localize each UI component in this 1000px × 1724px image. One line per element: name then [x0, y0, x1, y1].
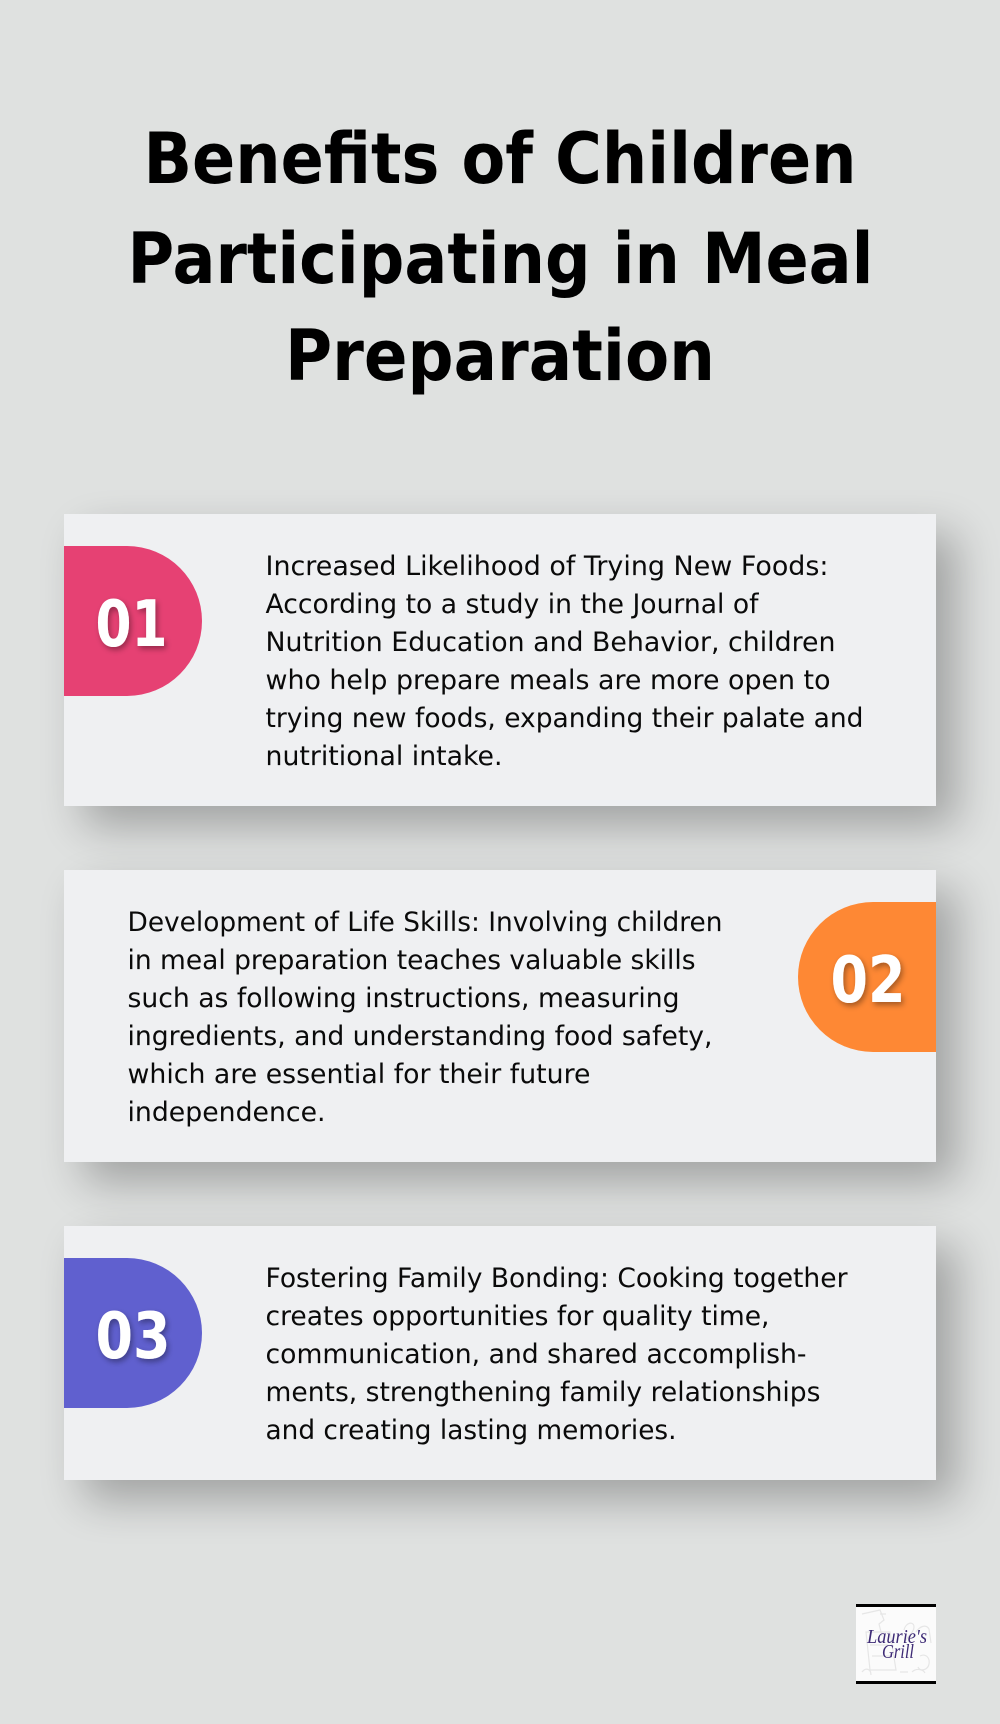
text: family bonding	[266, 1263, 848, 1446]
panel: benefit 03	[64, 1226, 956, 1500]
text: family bonding: ments, strengthening family relationships	[266, 1377, 820, 1408]
title: Preparation	[285, 315, 715, 397]
panel: benefit 02	[64, 870, 956, 1182]
badge: 03	[64, 1258, 202, 1408]
text: life skills: ingredients, and understanding food safety,	[128, 1021, 712, 1052]
text: trying new foods: Increased Likelihood of Trying New Foods:	[266, 551, 828, 582]
text: life skills: which are essential for their future	[128, 1059, 590, 1090]
title: Participating in Meal	[128, 218, 874, 300]
badge: 02	[798, 902, 936, 1052]
text: family bonding: communication, and shared accomplish-	[266, 1339, 806, 1370]
text: trying new foods: trying new foods, expanding their palate and	[266, 703, 864, 734]
text: family bonding: creates opportunities for quality time,	[266, 1301, 770, 1332]
logo: Laurie's Grill: Grill	[882, 1641, 914, 1663]
title	[128, 118, 874, 397]
badge: 01: 01	[96, 588, 168, 662]
text: life skills: Development of Life Skills: Involving children	[128, 907, 722, 938]
text: trying new foods: nutritional intake.	[266, 741, 502, 772]
panel: benefit 01	[64, 514, 956, 826]
text: family bonding: and creating lasting memories.	[266, 1415, 676, 1446]
logo: Laurie's Grill	[856, 1604, 936, 1684]
text: life skills: such as following instructions, measuring	[128, 983, 680, 1014]
text: life skills: in meal preparation teaches valuable skills	[128, 945, 696, 976]
text: trying new foods: Nutrition Education and Behavior, children	[266, 627, 836, 658]
title: Benefits of Children	[144, 118, 856, 200]
text: trying new foods	[266, 551, 864, 772]
text: family bonding: Fostering Family Bonding: Cooking together	[266, 1263, 848, 1294]
text: life skills	[128, 907, 722, 1128]
text: trying new foods: According to a study in the Journal of	[266, 589, 759, 620]
badge: 02: 02	[830, 944, 906, 1018]
badge: 01	[64, 546, 202, 696]
badge: 03: 03	[96, 1300, 170, 1374]
logo: Laurie's Grill: Laurie's	[866, 1626, 927, 1648]
text: trying new foods: who help prepare meals are more open to	[266, 665, 831, 696]
text: life skills: independence.	[128, 1097, 326, 1128]
